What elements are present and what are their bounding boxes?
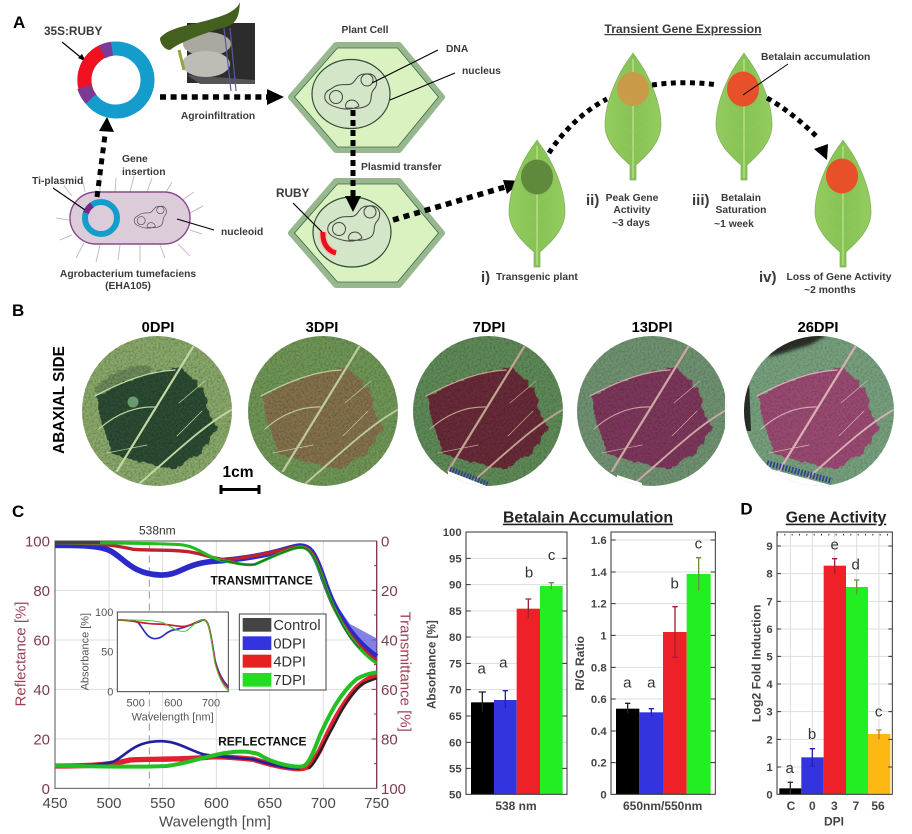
bar chart: log2 fold induction: d: [851, 556, 860, 573]
bar chart: log2 fold induction: C: [787, 799, 796, 813]
bar chart: R/G ratio: a: [647, 675, 656, 692]
bar chart: absorbance at 538 nm: [425, 527, 567, 813]
left axis labels: 60: [33, 633, 50, 650]
bar chart: absorbance at 538 nm: c: [548, 547, 556, 564]
legend: Control: [273, 618, 321, 634]
bar chart: R/G ratio: 0: [600, 789, 607, 801]
bar chart: log2 fold induction: 56: [871, 799, 885, 813]
bar chart: absorbance at 538 nm: 100: [443, 527, 462, 539]
leaf stage labels: ii): [586, 192, 599, 209]
leaf stage labels: ~1 week: [714, 219, 754, 230]
leaf stage labels: Betalain: [721, 193, 761, 204]
x axis labels: [42, 795, 389, 831]
x axis labels: 750: [364, 795, 389, 812]
leaf photo 0DPI: [82, 336, 233, 486]
bar chart: absorbance at 538 nm: 95: [449, 553, 462, 565]
text: bacterium labels: Ti-plasmid: [32, 176, 83, 187]
leaf photo 13DPI: [577, 336, 730, 489]
DPI headings: 26DPI: [798, 320, 838, 336]
bar chart: log2 fold induction: [750, 532, 892, 828]
DPI headings: 13DPI: [632, 320, 672, 336]
chart: reflectance and transmittance spectra: 538nm: [139, 523, 176, 537]
bar chart: absorbance at 538 nm: a: [499, 655, 508, 672]
bar chart: absorbance at 538 nm: a: [477, 660, 486, 677]
bar chart: R/G ratio: 0.2: [591, 758, 607, 770]
legend: 0DPI: [273, 636, 306, 652]
bar chart: R/G ratio: a: [623, 675, 632, 692]
bar chart: log2 fold induction: e: [830, 536, 839, 553]
chart: reflectance and transmittance spectra: REFLECTANCE: [218, 734, 306, 748]
DPI headings: [142, 320, 838, 336]
inset absorbance chart: 100: [95, 607, 113, 619]
bar chart: absorbance at 538 nm: 65: [449, 711, 462, 723]
heading: transient gene expression: Transient Gene Expression: [604, 22, 762, 36]
right axis labels: 40: [381, 633, 398, 650]
left axis labels: 40: [33, 682, 50, 699]
left axis labels: [25, 534, 50, 798]
right axis labels: 20: [381, 583, 398, 600]
bar chart: log2 fold induction: 0: [766, 789, 773, 801]
bar chart: absorbance at 538 nm: 90: [449, 580, 462, 592]
plant cell top: nucleus: [462, 66, 501, 77]
leaf photo 26DPI: [744, 333, 895, 491]
leaf photo 7DPI: [413, 336, 564, 491]
leaf iv: [815, 140, 871, 267]
leaf stage labels: Betalain accumulation: [761, 52, 870, 63]
panel label D: D: [740, 500, 753, 519]
bar chart: log2 fold induction: 4: [766, 679, 773, 691]
scale bar 1cm: 1cm: [222, 464, 254, 481]
bar chart: R/G ratio: 1.2: [591, 599, 607, 611]
leaf stage labels: i): [481, 269, 490, 286]
x axis labels: 450: [42, 795, 68, 812]
bar chart: log2 fold induction: Log2 Fold Induction: [750, 604, 764, 722]
bar chart: log2 fold induction: 3: [831, 799, 838, 813]
chart: reflectance and transmittance spectra: [12, 523, 414, 831]
arrow: plasmid transfer: [345, 110, 361, 212]
heading: betalain accumulation: Betalain Accumulation: [503, 510, 673, 527]
text: plasmid transfer: Plasmid transfer: [361, 162, 442, 173]
bar chart: absorbance at 538 nm: 75: [449, 658, 462, 670]
heading: gene activity: Gene Activity: [786, 510, 886, 527]
x axis labels: 700: [311, 795, 336, 812]
left axis labels: 0: [42, 781, 50, 798]
bar chart: log2 fold induction: 7: [853, 799, 860, 813]
text: bacterium labels: Gene: [122, 154, 148, 165]
arrows between leaves: [549, 83, 828, 160]
leaf stage labels: iv): [759, 269, 777, 286]
text: bacterium labels: insertion: [122, 167, 165, 178]
plant cell top: [291, 25, 501, 150]
text: bacterium labels: (EHA105): [105, 281, 151, 292]
icon: agroinfiltration device: [160, 2, 255, 91]
bar chart: log2 fold induction: 7: [766, 596, 773, 608]
x axis labels: 650: [257, 795, 282, 812]
legend: 7DPI: [273, 673, 306, 689]
bar chart: R/G ratio: 0.8: [591, 662, 607, 674]
panel label A: A: [13, 13, 25, 32]
arrow: plasmid to plant cell: [160, 89, 284, 105]
bacterium: [53, 176, 214, 262]
bar chart: R/G ratio: 0.6: [591, 694, 607, 706]
bar chart: log2 fold induction: 2: [766, 734, 773, 746]
chart: reflectance and transmittance spectra: TRANSMITTANCE: [211, 574, 313, 588]
leaf stage labels: Activity: [613, 205, 651, 216]
inset absorbance chart: 50: [101, 646, 113, 658]
inset absorbance chart: [79, 607, 228, 724]
inset absorbance chart: 0: [107, 686, 113, 698]
left axis labels: 20: [33, 732, 50, 749]
leaf stage labels: ~3 days: [612, 218, 650, 229]
bar chart: absorbance at 538 nm: 50: [449, 789, 462, 801]
bar chart: log2 fold induction: 8: [766, 569, 773, 581]
bar chart: absorbance at 538 nm: 60: [449, 737, 462, 749]
inset absorbance chart: 500: [127, 698, 145, 710]
inset absorbance chart: Absorbance [%]: [79, 613, 91, 690]
bar chart: log2 fold induction: 1: [766, 762, 773, 774]
bar chart: log2 fold induction: 5: [766, 651, 773, 663]
leaf ii: [605, 53, 661, 180]
legend: 4DPI: [273, 655, 306, 671]
leaf stage labels: ~2 months: [804, 285, 856, 296]
inset absorbance chart: 600: [164, 698, 182, 710]
transmittance curves: [55, 542, 377, 663]
legend: [239, 614, 326, 690]
reflectance curves: [55, 672, 377, 769]
panel A: plasmid 35S:RUBY: [44, 24, 148, 112]
scale bar 1cm: [221, 464, 259, 494]
bar chart: R/G ratio: 1.6: [591, 535, 607, 547]
bar chart: R/G ratio: 0.4: [591, 726, 607, 738]
right axis labels: [381, 534, 406, 798]
leaf stage labels: Transgenic plant: [496, 272, 578, 283]
leaf photo 3DPI: [248, 336, 399, 486]
plant cell bottom with RUBY: RUBY: [276, 186, 310, 200]
x axis labels: 500: [96, 795, 122, 812]
leaf stage labels: Saturation: [716, 205, 766, 216]
right axis labels: 60: [381, 682, 398, 699]
chart: reflectance and transmittance spectra: Reflectance [%]: [12, 602, 29, 706]
DPI headings: 7DPI: [473, 320, 505, 336]
inset absorbance chart: Wavelength [nm]: [132, 712, 214, 724]
bar chart: absorbance at 538 nm: 80: [449, 632, 462, 644]
bar chart: R/G ratio: R/G Ratio: [573, 636, 587, 691]
bar chart: log2 fold induction: 3: [766, 707, 773, 719]
bar chart: R/G ratio: 650nm/550nm: [623, 799, 702, 813]
leaf i: [509, 140, 565, 267]
leaf stage labels: Loss of Gene Activity: [787, 272, 892, 283]
left axis labels: 80: [33, 583, 50, 600]
panel A: plasmid 35S:RUBY: 35S:RUBY: [44, 24, 102, 38]
leaf stage labels: iii): [692, 192, 710, 209]
bar chart: log2 fold induction: a: [785, 760, 794, 777]
bar chart: R/G ratio: [573, 532, 715, 813]
plant cell top: DNA: [446, 44, 469, 55]
left axis labels: 100: [25, 534, 50, 551]
bar chart: log2 fold induction: c: [875, 704, 883, 721]
charts: betalain accumulation and gene activity: [425, 500, 892, 828]
right axis labels: 0: [381, 534, 389, 551]
inset absorbance chart: 700: [202, 698, 220, 710]
bar chart: absorbance at 538 nm: b: [525, 564, 533, 581]
text: bacterium labels: nucleoid: [221, 227, 263, 238]
side label: ABAXIAL SIDE: [51, 346, 68, 454]
leaf stage labels: Peak Gene: [606, 193, 659, 204]
DPI headings: 0DPI: [142, 320, 174, 336]
text: bacterium labels: Agrobacterium tumefaciens: [60, 269, 196, 280]
plant cell top: Plant Cell: [342, 25, 389, 36]
bar chart: absorbance at 538 nm: 70: [449, 685, 462, 697]
bar chart: absorbance at 538 nm: 538 nm: [495, 799, 537, 813]
bar chart: absorbance at 538 nm: Absorbance [%]: [425, 620, 438, 709]
x axis labels: 600: [204, 795, 229, 812]
panel label C: C: [12, 502, 24, 521]
right axis labels: 80: [381, 732, 398, 749]
arrow: cell to transgenic leaf: [393, 180, 521, 220]
plant cell bottom with RUBY: [276, 181, 442, 285]
bar chart: log2 fold induction: 9: [766, 541, 773, 553]
leaf stage labels: [481, 52, 892, 296]
bar chart: log2 fold induction: 0: [809, 799, 816, 813]
bar chart: R/G ratio: 1: [600, 630, 607, 642]
bar chart: R/G ratio: c: [695, 536, 703, 553]
bar chart: log2 fold induction: 6: [766, 624, 773, 636]
leaf iii: [716, 53, 788, 180]
bar chart: R/G ratio: b: [670, 575, 679, 592]
chart: reflectance and transmittance spectra: Transmittance [%]: [397, 612, 414, 732]
DPI headings: 3DPI: [306, 320, 338, 336]
right axis labels: 100: [381, 781, 406, 798]
bar chart: absorbance at 538 nm: 85: [449, 606, 462, 618]
bar chart: log2 fold induction: DPI: [824, 814, 844, 828]
bar chart: R/G ratio: 1.4: [591, 567, 607, 579]
x axis labels: 550: [150, 795, 175, 812]
text: bacterium labels: [32, 154, 263, 292]
x axis labels: Wavelength [nm]: [159, 814, 271, 831]
panel label B: B: [12, 301, 24, 320]
bar chart: absorbance at 538 nm: 55: [449, 763, 462, 775]
text: Agroinfiltration: Agroinfiltration: [181, 111, 255, 122]
bar chart: log2 fold induction: b: [808, 726, 816, 743]
arrow: gene insertion: [97, 117, 114, 197]
